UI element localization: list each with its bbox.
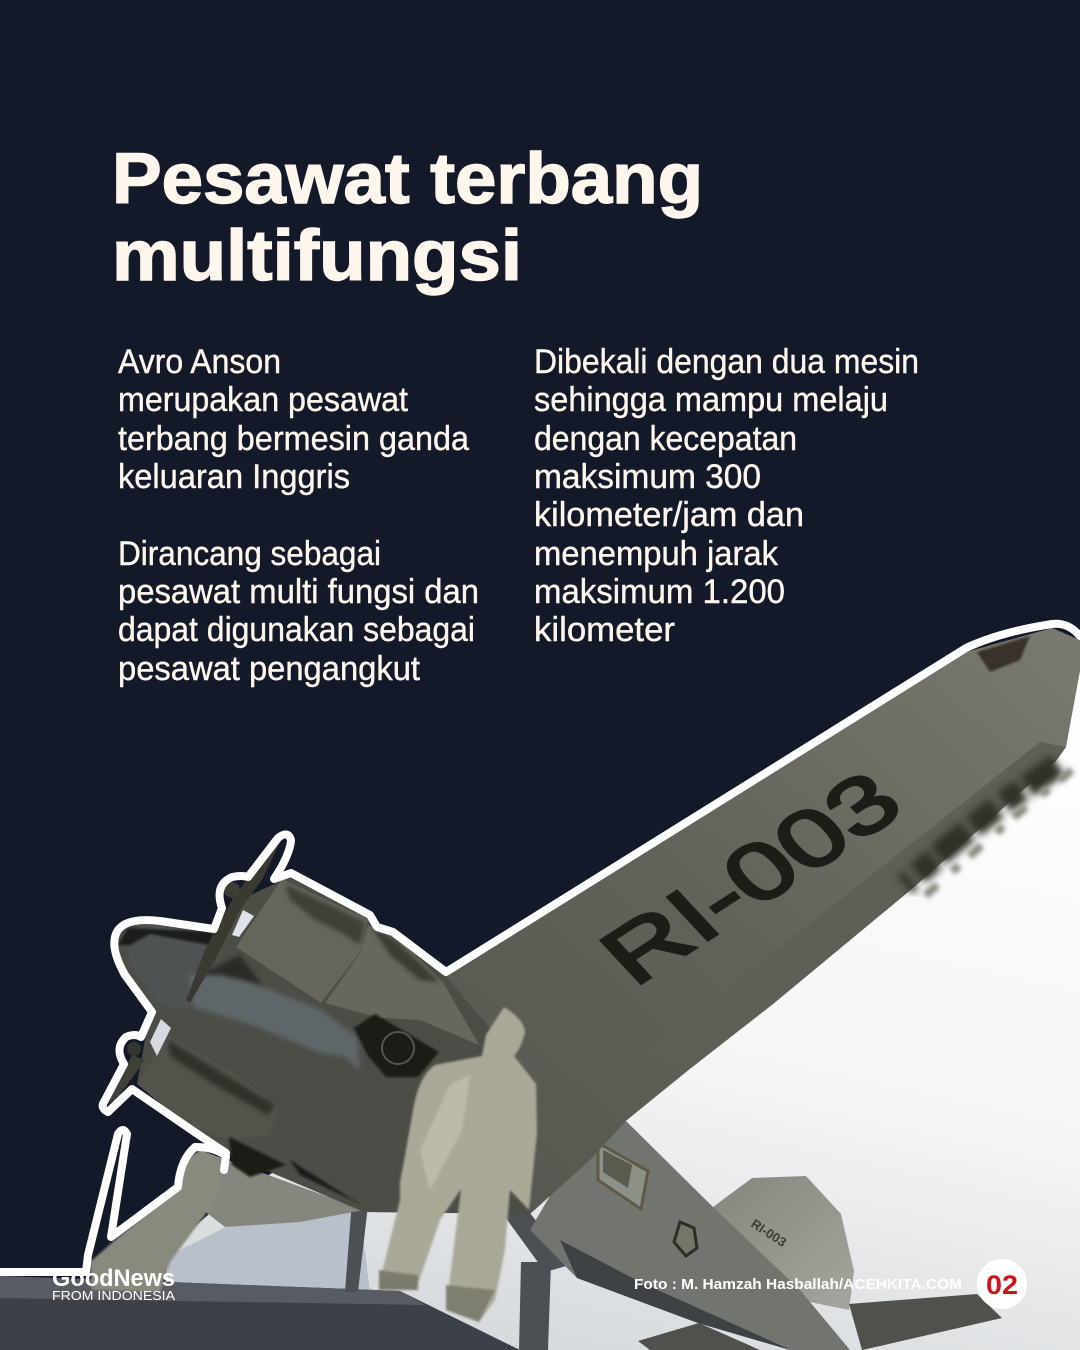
wing flap xyxy=(645,742,1066,1068)
nose xyxy=(118,925,262,1010)
page number badge: 02 xyxy=(986,1270,1018,1300)
text block: left column second paragraph: Dirancang sebagai xyxy=(118,535,381,573)
title: Pesawat terbang xyxy=(112,140,703,219)
text block: right column: menempuh jarak xyxy=(534,535,779,573)
text block: right column: Dibekali dengan dua mesin xyxy=(534,343,919,381)
upper engine xyxy=(236,879,479,1045)
text block: left column first paragraph: merupakan pesawat xyxy=(118,381,409,419)
text block: right column: dengan kecepatan xyxy=(534,420,797,458)
text block: left column first paragraph: terbang bermesin ganda xyxy=(118,420,469,458)
tail registration marking: RI-003 xyxy=(748,1216,789,1250)
wing grime xyxy=(905,636,1072,905)
logo: GoodNews from Indonesia: GoodNews xyxy=(52,1265,175,1292)
text block: left column first paragraph xyxy=(118,343,469,496)
standing statue xyxy=(379,1007,537,1322)
belly shadow xyxy=(290,1160,362,1205)
landing gear: upper wheel xyxy=(354,1014,439,1077)
white cut-out outline xyxy=(0,624,1080,1272)
photo: sky behind aircraft xyxy=(160,665,1080,1350)
text block: right column: maksimum 300 xyxy=(534,458,761,496)
text block: left column first paragraph: Avro Anson xyxy=(118,343,281,381)
propeller: lower xyxy=(108,1019,171,1104)
photo: pedestal xyxy=(0,1276,520,1350)
photo: left sky tint xyxy=(168,1210,370,1292)
fuselage highlight xyxy=(189,975,360,1070)
title xyxy=(112,140,703,296)
main wing xyxy=(446,628,1080,1214)
rear fuselage and tail xyxy=(530,1110,1002,1350)
photo: support struts xyxy=(345,1200,570,1350)
text block: right column: sehingga mampu melaju xyxy=(534,381,888,419)
logo: GoodNews from Indonesia: FROM INDONESIA xyxy=(52,1288,175,1303)
aircraft xyxy=(0,624,1080,1350)
text block: left column second paragraph: pesawat pengangkut xyxy=(118,650,421,688)
text block: left column first paragraph: keluaran Inggris xyxy=(118,458,350,496)
photo credit: Foto : M. Hamzah Hasballah/ACEHKITA.COM xyxy=(634,1276,962,1293)
text block: right column: maksimum 1.200 xyxy=(534,573,785,611)
lower engine xyxy=(137,1035,279,1140)
page number badge xyxy=(977,1259,1027,1309)
title: multifungsi xyxy=(112,217,522,296)
propeller: upper xyxy=(186,836,283,1003)
photo: left wing underside xyxy=(190,1150,364,1227)
text block: right column: kilometer xyxy=(534,611,675,649)
photo: second statue at left xyxy=(90,1150,222,1292)
fuselage base xyxy=(114,876,640,1214)
wing registration marking: RI-003 xyxy=(581,754,920,1001)
text block: left column second paragraph: dapat digunakan sebagai xyxy=(118,611,475,649)
text block: left column second paragraph xyxy=(118,535,479,688)
landing gear: lower wheel xyxy=(229,1137,286,1177)
text block: right column xyxy=(534,343,919,649)
text block: right column: kilometer/jam dan xyxy=(534,496,804,534)
text block: left column second paragraph: pesawat multi fungsi dan xyxy=(118,573,479,611)
